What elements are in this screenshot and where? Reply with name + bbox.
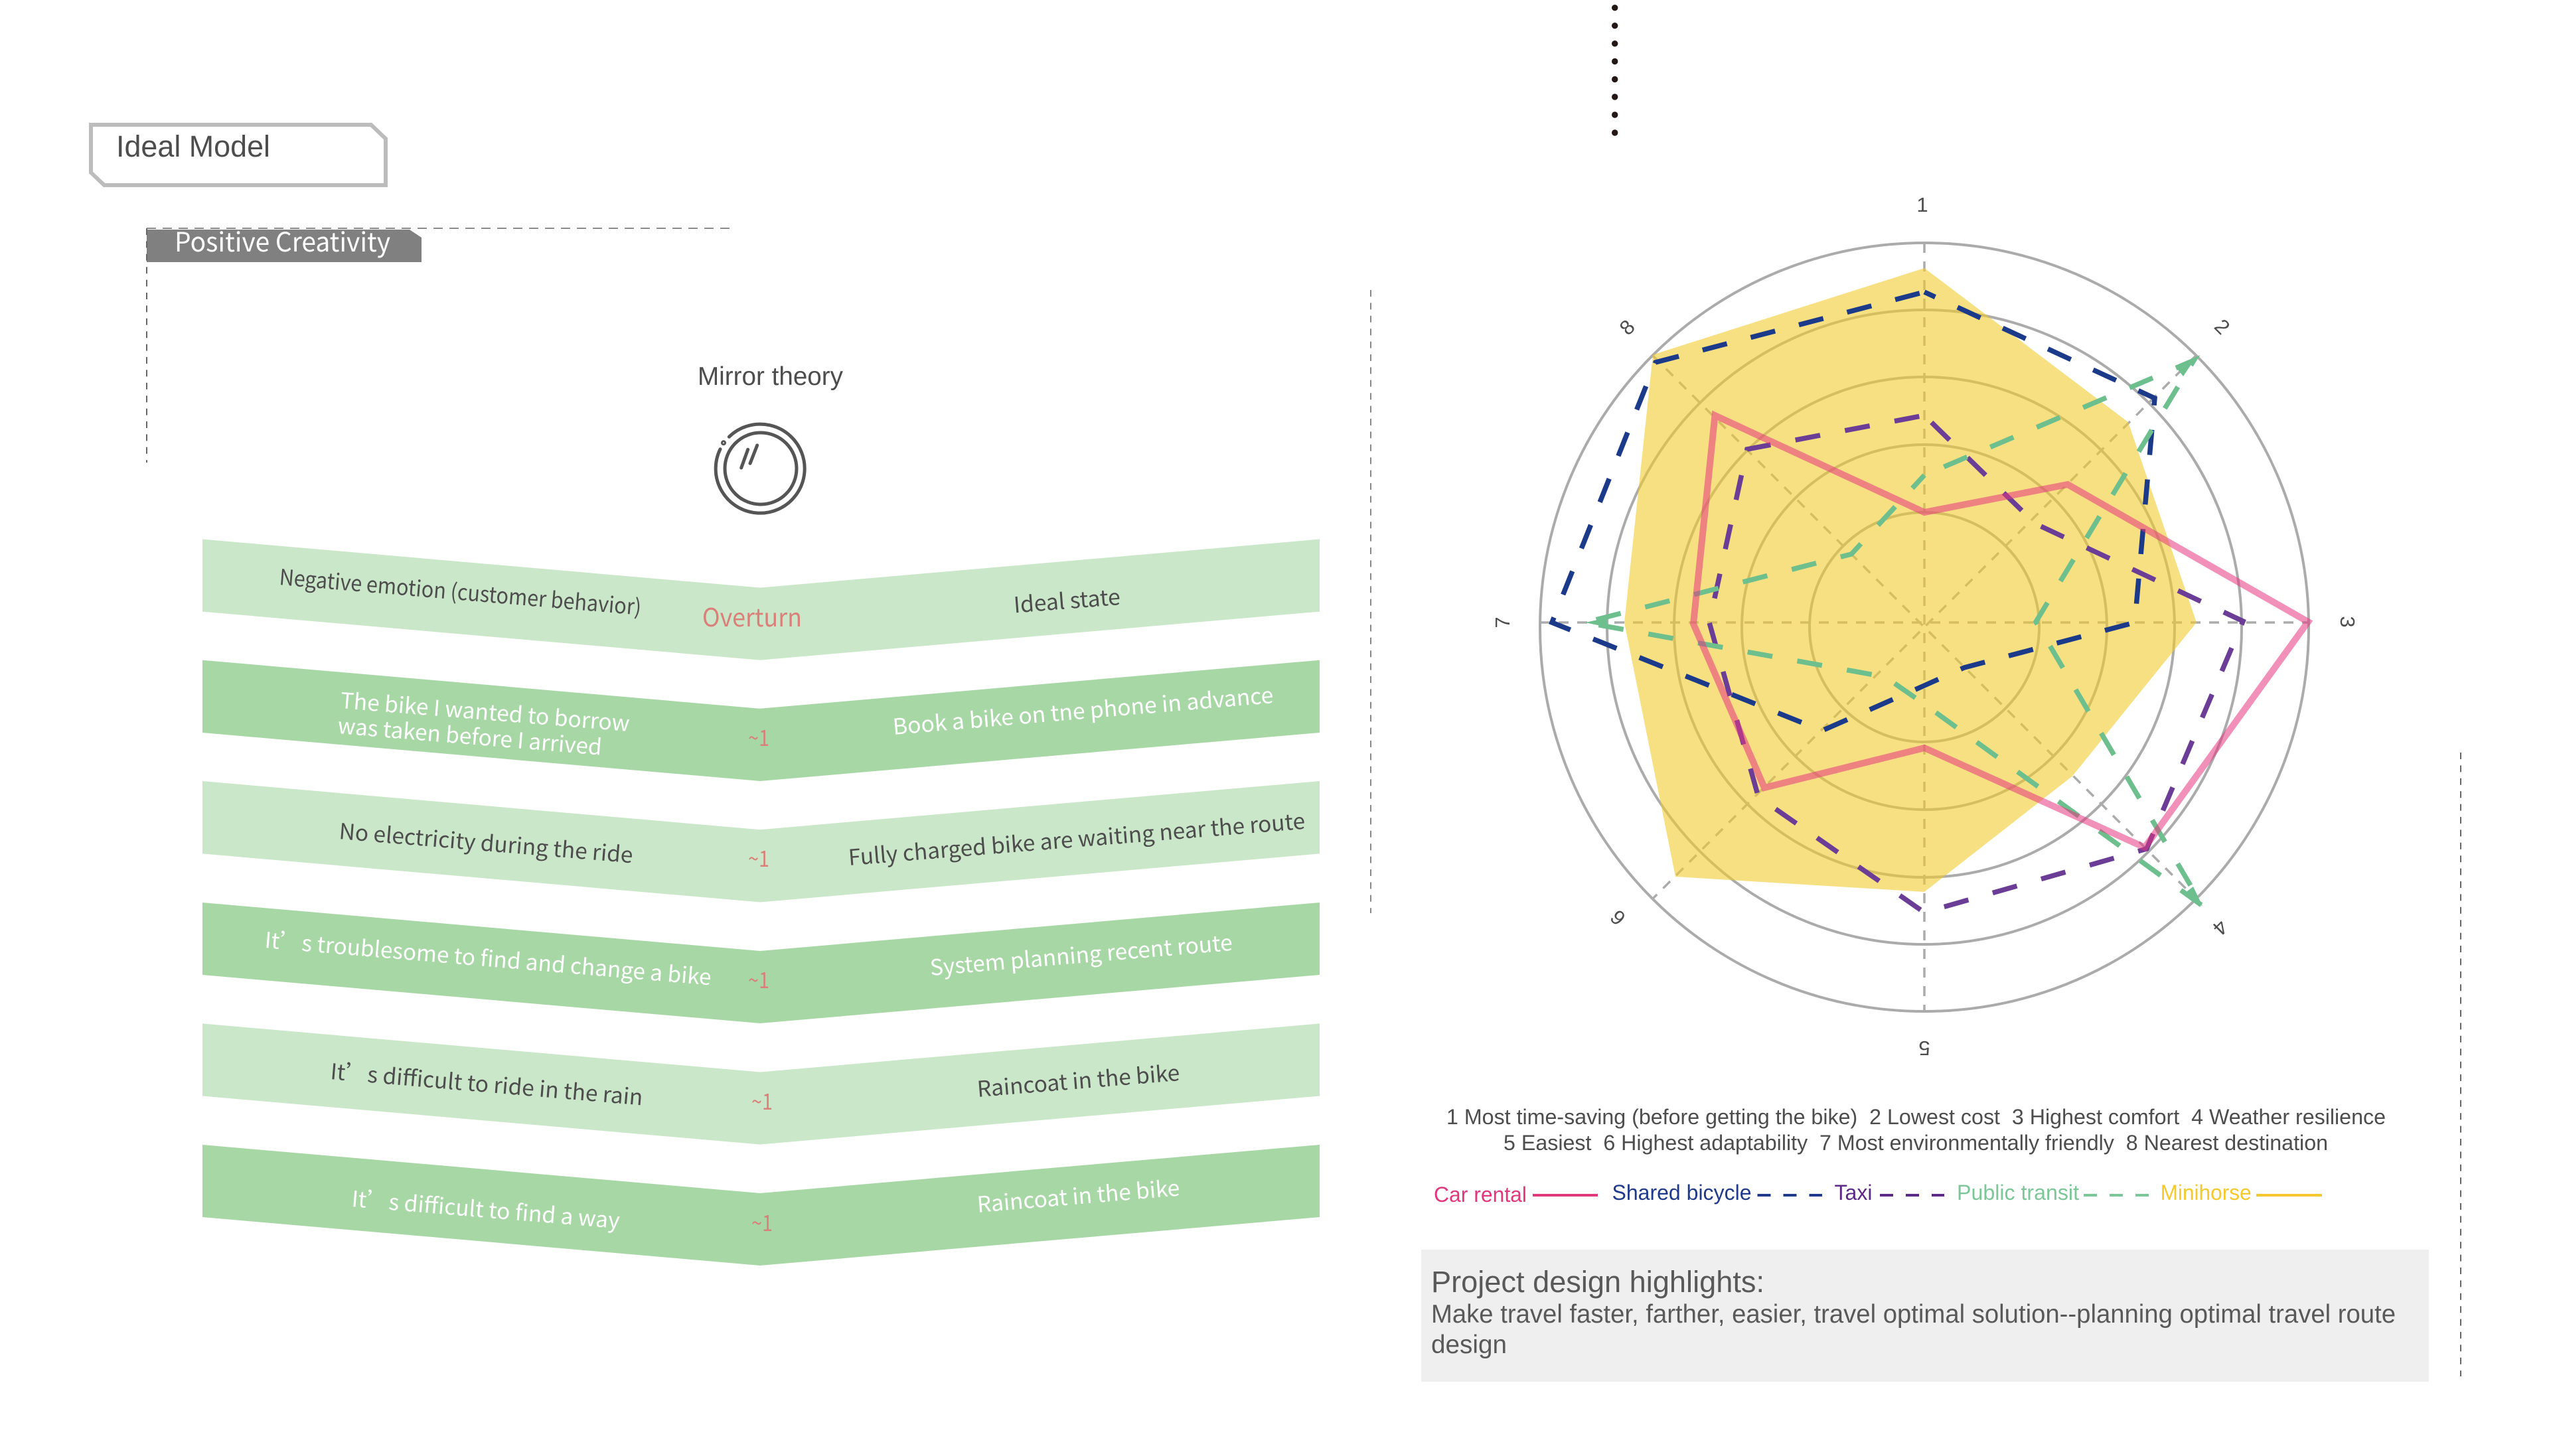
chevron row 5: It’s difficult to ride in the rain (329, 1054, 645, 1112)
chevron row 2: was taken before I arrived (337, 708, 603, 762)
chevron row 2: The bike I wanted to borrow (339, 683, 631, 738)
axis labels: 8 (1615, 315, 1640, 340)
legend (1434, 1181, 2322, 1206)
panel: project design highlights (1421, 1250, 2429, 1382)
legend: Shared bicycle: Shared bicycle (1612, 1181, 1751, 1204)
series: Shared bicycle (1552, 292, 2155, 731)
series: Public transit (1585, 360, 2202, 906)
radar chart (1491, 193, 2359, 1060)
axis description text (1446, 1105, 2386, 1155)
legend: Public transit: Public transit (1957, 1181, 2079, 1204)
heading: Mirror theory: Mirror theory (698, 362, 843, 391)
axis labels: 3 (2336, 616, 2359, 628)
panel: project design highlights: Project design highlights: (1431, 1265, 1764, 1299)
chevron row 3: No electricity during the ride (338, 814, 635, 869)
axis description text: 5 Easiest 6 Highest adaptability 7 Most environmentally friendly 8 Nearest destination (1504, 1131, 2328, 1155)
axis labels: 7 (1491, 617, 1514, 628)
chevron row 2 (202, 660, 1320, 781)
chevron row 2: ~1 (748, 721, 769, 753)
chevron row 4: ~1 (748, 963, 769, 995)
chevron row 1: header: Negative emotion (customer behavior) (278, 559, 643, 622)
chevron row 4: It’s troublesome to find and change a bike (264, 922, 713, 991)
axis labels: 5 (1918, 1037, 1930, 1060)
axis labels (1491, 193, 2359, 1060)
panel: project design highlights: design (1431, 1331, 1507, 1359)
chevron row 3 (202, 781, 1320, 903)
axis labels: 2 (2210, 315, 2234, 339)
chevron row 6: It’s difficult to find a way (350, 1181, 621, 1235)
heading: Ideal Model: Ideal Model (116, 129, 270, 163)
chevron row 6: ~1 (751, 1206, 773, 1238)
series: Minihorse (1624, 268, 2197, 892)
chevron row 1: header: Overturn (702, 597, 802, 634)
chevron row 4: System planning recent route (929, 925, 1233, 982)
radar grid (1540, 243, 2309, 1011)
chevron row 1: header (202, 539, 1320, 660)
axis description text: 1 Most time-saving (before getting the bike) 2 Lowest cost 3 Highest comfort 4 Weather resilience (1446, 1105, 2386, 1129)
series: Car rental (1693, 415, 2308, 847)
chevron row 3: Fully charged bike are waiting near the route (847, 804, 1306, 872)
axis labels: 6 (1606, 905, 1630, 930)
axis labels: 1 (1916, 193, 1928, 216)
chevron row 2: Book a bike on tne phone in advance (891, 678, 1274, 741)
panel: project design highlights: Make travel faster, farther, easier, travel optimal solution--planning optimal travel route (1431, 1300, 2396, 1329)
chevron row 5: Raincoat in the bike (976, 1055, 1181, 1104)
dotted vertical connector (1612, 5, 1618, 136)
chevron row 6: Raincoat in the bike (976, 1171, 1181, 1219)
legend: Taxi: Taxi (1835, 1181, 1872, 1204)
chevron row 6 (202, 1145, 1320, 1266)
chevron row 4 (202, 903, 1320, 1023)
series: Taxi (1709, 415, 2243, 912)
tag: Positive Creativity: Positive Creativity (175, 221, 390, 259)
chevron row 3: ~1 (748, 841, 769, 873)
legend: Minihorse: Minihorse (2161, 1181, 2252, 1204)
legend: Car rental: Car rental (1434, 1183, 1527, 1206)
chevron row 5 (202, 1023, 1320, 1145)
chevron row 5: ~1 (751, 1084, 773, 1116)
heading: Ideal Model (91, 125, 386, 185)
chevron row 1: header: Ideal state (1012, 579, 1121, 619)
axis labels: 4 (2208, 915, 2232, 940)
icon: mirror (716, 424, 805, 513)
